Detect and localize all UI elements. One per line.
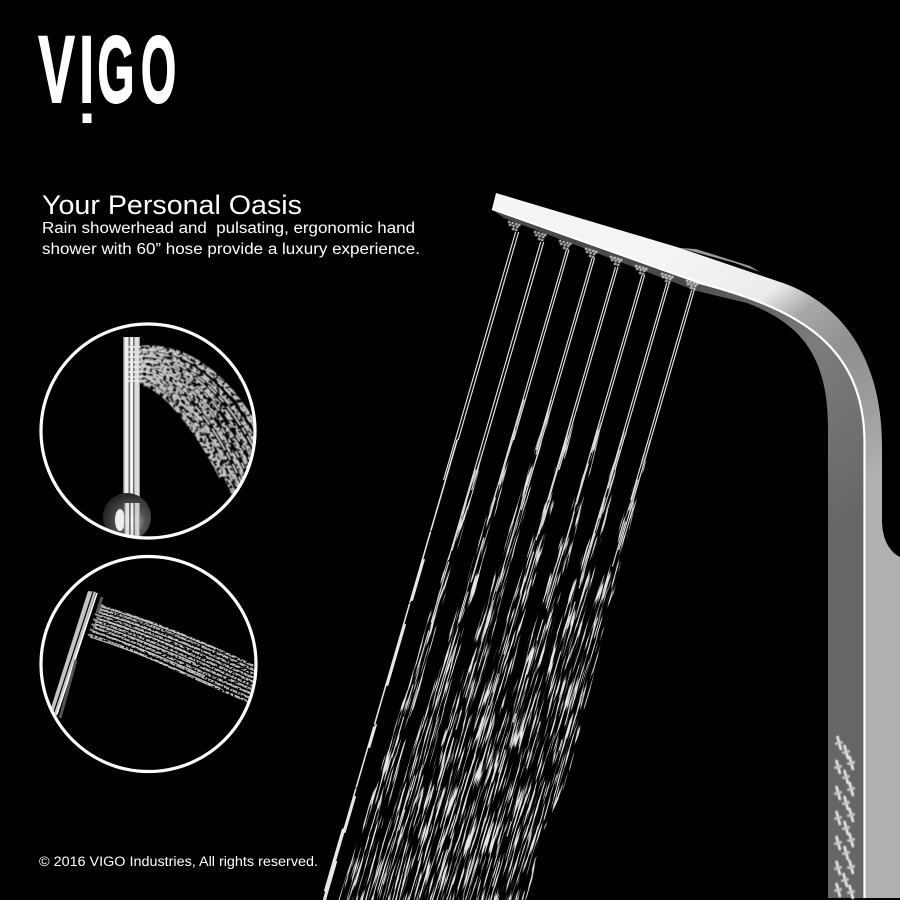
heading: Your Personal Oasis: Your Personal Oasis: [42, 190, 302, 220]
body spray jets: [834, 737, 855, 898]
control button: [680, 248, 760, 272]
falling rain water: [322, 232, 727, 900]
VIGO logo: V: [38, 17, 75, 123]
rain panel edge: [50, 591, 102, 720]
panel top and front face: [492, 193, 900, 898]
hand shower handle: [123, 337, 140, 497]
shower panel: [492, 193, 900, 898]
panel side face: [503, 217, 864, 898]
spray droplets: [140, 348, 254, 490]
hand shower spray base: [140, 348, 264, 498]
VIGO logo: O: [141, 16, 176, 122]
white edge highlight: [492, 209, 864, 898]
inset: rain jets circle: [41, 556, 258, 772]
description text: shower with 60” hose provide a luxury experience.: [42, 241, 420, 258]
circle outline: [41, 556, 256, 772]
leftmost bright stream: [323, 440, 459, 900]
hand shower bracket ball: [103, 493, 151, 541]
dashed lower water lines: [351, 400, 661, 900]
hand shower nozzles: [128, 347, 141, 381]
continuous upper water lines: [420, 232, 711, 560]
fine jet lines: [90, 606, 220, 688]
description text: Rain showerhead and pulsating, ergonomic hand: [42, 220, 415, 237]
VIGO logo: G: [98, 16, 134, 122]
VIGO logo: [38, 16, 176, 123]
jet nozzle tips: [87, 604, 104, 636]
broken water streams: [339, 400, 678, 900]
inset: hand shower spray circle: [41, 324, 264, 541]
circle outline: [41, 324, 255, 538]
copyright: © 2016 VIGO Industries, All rights reserved.: [39, 854, 318, 869]
rain nozzles: [508, 221, 698, 290]
jets of water: [90, 606, 258, 703]
description text: [42, 220, 420, 258]
VIGO logo: I: [79, 18, 94, 123]
rain head underside: [494, 211, 701, 291]
